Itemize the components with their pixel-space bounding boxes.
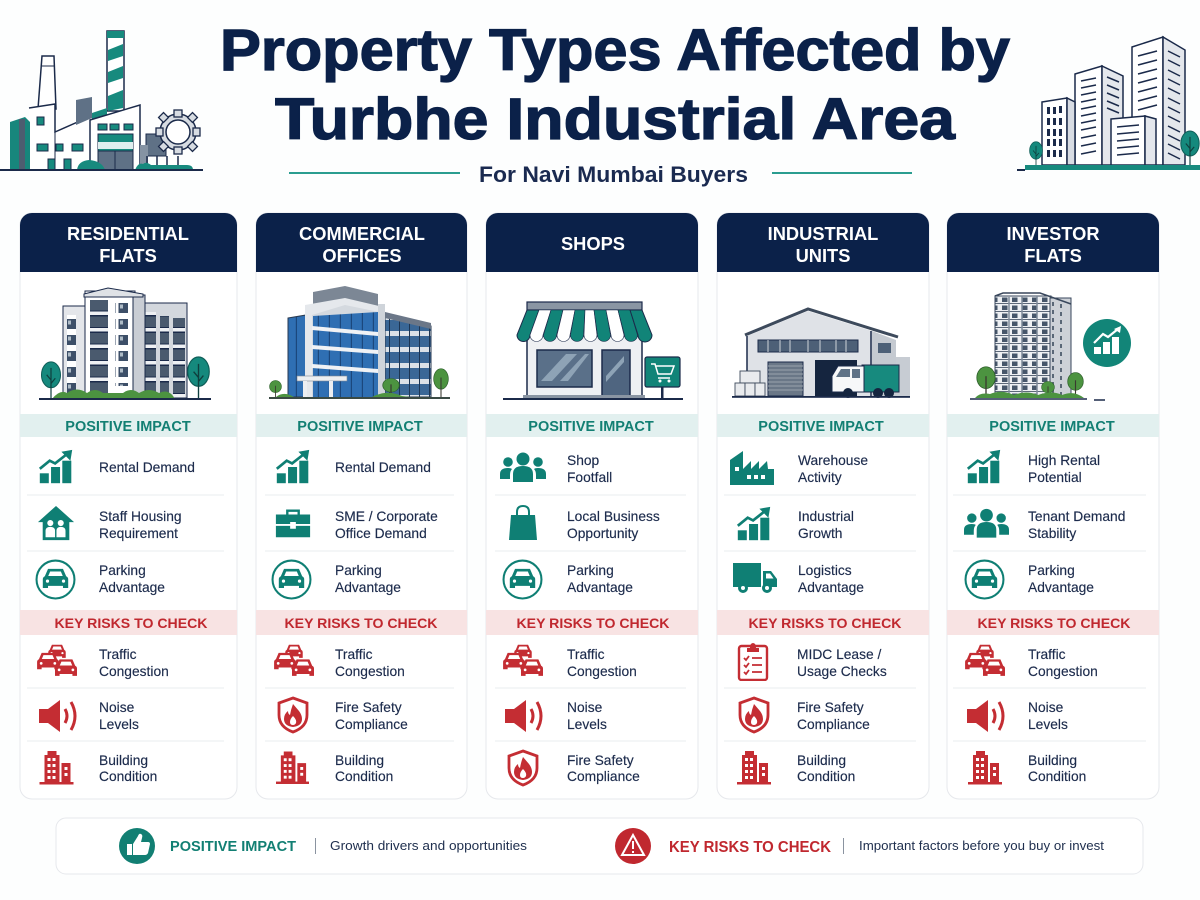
item: parking advantage [37,561,165,598]
item: building condition: Condition [99,769,157,784]
item: high rental potential: Potential [1028,470,1082,485]
item: noise levels [505,700,607,732]
item: rental demand [40,450,195,483]
item: industrial growth [738,507,854,541]
item: tenant demand stability: Stability [1028,526,1076,541]
title: Property Types Affected by [220,18,1010,83]
heading: investor flats: FLATS [1024,245,1082,266]
item: fire safety compliance [740,698,870,732]
item: noise levels: Noise [567,700,603,715]
band: key risks [486,610,698,635]
item: midc lease usage checks [739,643,887,680]
illustration: city skyline [1017,37,1200,171]
heading: shops: SHOPS [561,233,625,254]
item: parking advantage: Parking [567,563,614,578]
legend: positive impact: POSITIVE IMPACT [170,839,296,855]
item: warehouse activity: Warehouse [798,453,868,468]
title: Turbhe Industrial Area [275,87,956,152]
icon: warning [615,828,651,864]
item: traffic congestion: Traffic [567,647,605,662]
heading: investor flats [947,213,1159,272]
item: traffic congestion: Congestion [335,664,405,679]
item: parking advantage: Advantage [567,580,633,595]
item: parking advantage: Parking [99,563,146,578]
item: traffic congestion: Congestion [1028,664,1098,679]
item: parking advantage: Advantage [1028,580,1094,595]
item: fire safety compliance: Fire Safety [335,700,402,715]
item: parking advantage: Parking [1028,563,1075,578]
item: fire safety compliance: Fire Safety [567,753,634,768]
band: key risks: KEY RISKS TO CHECK [978,615,1131,631]
panel: investor flats [947,213,1159,799]
item: traffic congestion: Congestion [99,664,169,679]
band: key risks: KEY RISKS TO CHECK [749,615,902,631]
item: staff housing requirement: Staff Housing [99,509,182,524]
title [220,18,1010,152]
item: shop footfall: Shop [567,453,600,468]
item: fire safety compliance: Compliance [567,769,640,784]
item: noise levels: Noise [99,700,135,715]
item: midc lease usage checks: Usage Checks [797,664,887,679]
item: building condition: Building [335,753,384,768]
heading: investor flats: INVESTOR [1006,223,1100,244]
item: traffic congestion [965,645,1098,679]
icon: thumbs up [119,828,155,864]
band: key risks: KEY RISKS TO CHECK [285,615,438,631]
band: key risks [717,610,929,635]
legend: key risks to check: Important factors before you buy or invest [859,838,1104,853]
item: noise levels: Noise [1028,700,1064,715]
item: parking advantage [966,561,1094,598]
illustration: apartment block [39,288,211,400]
item: local business opportunity [509,506,660,541]
illustration: tower with growth badge [970,293,1131,400]
item: fire safety compliance: Compliance [335,717,408,732]
item: parking advantage: Advantage [335,580,401,595]
item: building condition: Condition [1028,769,1086,784]
item: noise levels: Levels [99,717,139,732]
band: positive impact [20,414,237,437]
band: positive impact: POSITIVE IMPACT [297,419,423,435]
panel: residential flats [20,213,237,799]
legend: key risks to check [669,838,1104,856]
item: fire safety compliance [509,751,640,785]
item: building condition [276,751,393,784]
item: warehouse activity: Activity [798,470,842,485]
item: building condition: Building [99,753,148,768]
item: noise levels [967,700,1068,732]
item: high rental potential: High Rental [1028,453,1100,468]
item: tenant demand stability: Tenant Demand [1028,509,1125,524]
legend: positive impact: Growth drivers and opportunities [330,838,528,853]
item: sme corporate office demand [276,509,438,541]
band: positive impact: POSITIVE IMPACT [989,419,1115,435]
band: positive impact: POSITIVE IMPACT [65,419,191,435]
item: logistics advantage: Logistics [798,563,852,578]
band: key risks: KEY RISKS TO CHECK [55,615,208,631]
item: building condition [737,751,855,784]
legend [56,818,1143,874]
item: warehouse activity [730,451,868,485]
item: local business opportunity: Local Business [567,509,660,524]
item: traffic congestion: Congestion [567,664,637,679]
item: industrial growth: Industrial [798,509,854,524]
item: parking advantage: Advantage [99,580,165,595]
item: staff housing requirement [38,506,182,541]
item: traffic congestion: Traffic [1028,647,1066,662]
item: rental demand [277,450,431,483]
item: traffic congestion: Traffic [99,647,137,662]
heading: commercial offices [256,213,467,272]
panel: commercial offices [256,213,467,799]
item: midc lease usage checks: MIDC Lease / [797,647,882,662]
band: positive impact [717,414,929,437]
legend: positive impact [170,838,528,855]
band: positive impact [256,414,467,437]
item: high rental potential [968,450,1100,485]
item: traffic congestion [274,645,405,679]
item: staff housing requirement: Requirement [99,526,178,541]
heading: commercial offices: OFFICES [322,245,402,266]
band: positive impact: POSITIVE IMPACT [528,419,654,435]
subtitle: For Navi Mumbai Buyers [479,162,748,187]
item: fire safety compliance [279,698,408,732]
panel: shops [486,213,698,799]
item: building condition: Building [797,753,846,768]
band: positive impact: POSITIVE IMPACT [758,419,884,435]
item: tenant demand stability [964,509,1125,541]
item: fire safety compliance: Fire Safety [797,700,864,715]
illustration: office building [269,286,450,399]
item: fire safety compliance: Compliance [797,717,870,732]
heading: industrial units [717,213,929,272]
item: local business opportunity: Opportunity [567,526,638,541]
item: building condition [968,751,1086,784]
item: noise levels [39,700,139,732]
heading: shops [486,213,698,272]
item: sme corporate office demand: Office Demand [335,526,427,541]
heading: industrial units: UNITS [796,245,850,266]
item: parking advantage: Parking [335,563,382,578]
band: key risks [256,610,467,635]
item: parking advantage [504,561,633,598]
heading: commercial offices: COMMERCIAL [299,223,425,244]
illustration: factory [0,31,203,171]
item: shop footfall: Footfall [567,470,612,485]
item: industrial growth: Growth [798,526,842,541]
item: building condition: Building [1028,753,1077,768]
heading: industrial units: INDUSTRIAL [768,223,878,244]
item: building condition [40,751,157,784]
item: noise levels: Levels [567,717,607,732]
item: rental demand: Rental Demand [99,460,195,475]
illustration: warehouse with truck [732,309,910,398]
item: building condition: Condition [797,769,855,784]
item: sme corporate office demand: SME / Corporate [335,509,438,524]
item: noise levels: Levels [1028,717,1068,732]
item: rental demand: Rental Demand [335,460,431,475]
item: traffic congestion: Traffic [335,647,373,662]
panel: industrial units [717,213,929,799]
item: logistics advantage [733,563,864,595]
item: traffic congestion [503,645,637,679]
item: shop footfall [500,452,612,485]
heading: residential flats: RESIDENTIAL [67,223,189,244]
band: key risks [947,610,1159,635]
legend: key risks to check: KEY RISKS TO CHECK [669,839,832,856]
heading: residential flats: FLATS [99,245,157,266]
heading: residential flats [20,213,237,272]
band: key risks: KEY RISKS TO CHECK [517,615,670,631]
item: logistics advantage: Advantage [798,580,864,595]
item: traffic congestion [37,645,169,679]
band: positive impact [486,414,698,437]
band: key risks [20,610,237,635]
band: positive impact [947,414,1159,437]
item: building condition: Condition [335,769,393,784]
illustration: shop front [503,302,683,400]
item: parking advantage [273,561,401,598]
